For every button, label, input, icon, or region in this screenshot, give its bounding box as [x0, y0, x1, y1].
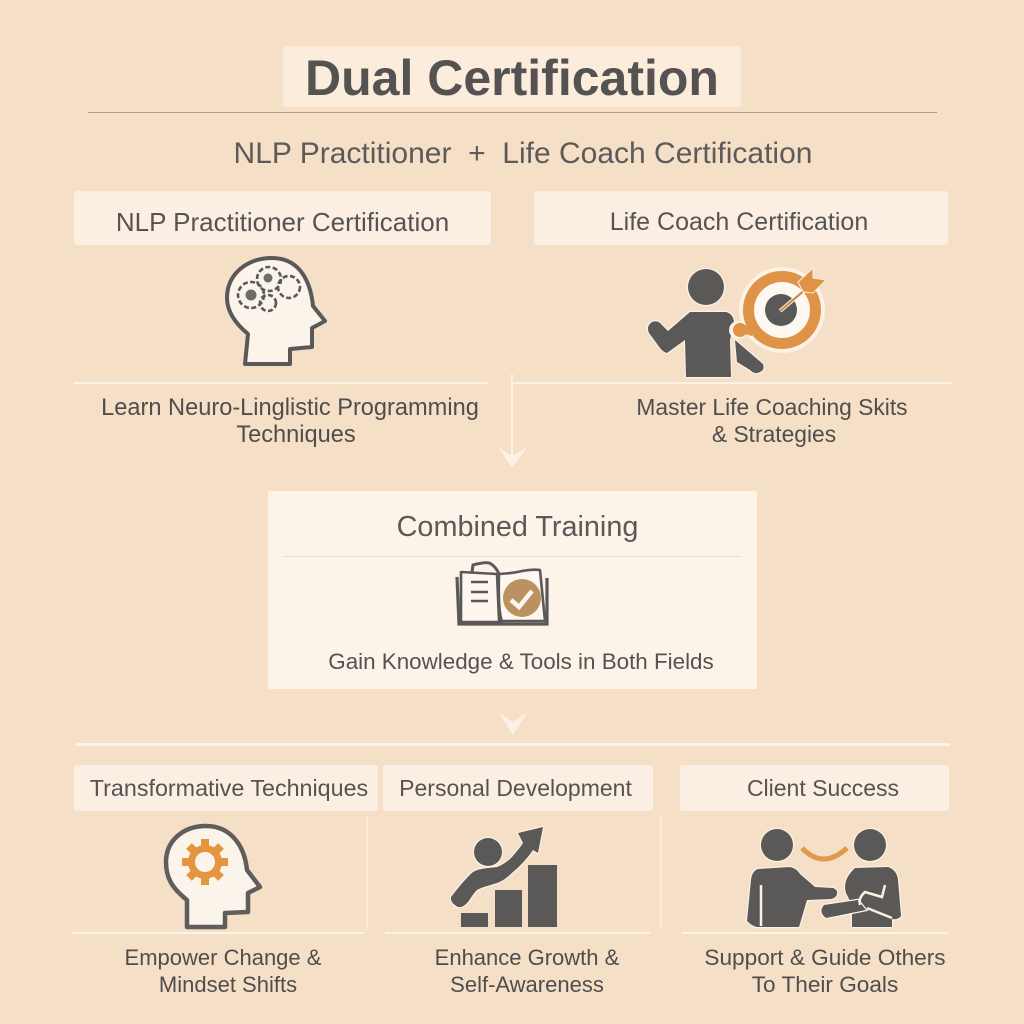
text: NLP description: Techniques [236, 422, 356, 448]
divider right [512, 382, 952, 384]
heading: Life Coach Certification [534, 191, 948, 245]
divider left [74, 382, 488, 384]
text: support and guide: Support & Guide Others [704, 945, 946, 970]
title: Dual Certification [305, 50, 719, 106]
icon: book with check [455, 561, 549, 626]
heading: client success: Client Success [747, 774, 899, 800]
heading: client success [680, 765, 949, 811]
divider: lower [76, 743, 950, 746]
icon: head with gears [225, 256, 328, 366]
heading: transformative techniques: Transformative Techniques [90, 774, 368, 800]
subtitle: NLP Practitioner + Life Coach Certification [234, 137, 812, 170]
heading: personal development: Personal Development [399, 774, 632, 800]
divider: col 3 [682, 932, 948, 934]
icon: person with target [646, 267, 827, 378]
text: NLP description: Learn Neuro-Linglistic Programming [101, 395, 479, 421]
text: enhance growth: Enhance Growth & [435, 945, 619, 970]
text: life coach description: & Strategies [712, 421, 836, 447]
arrow: chevron down [499, 713, 527, 735]
arrow: down [498, 374, 527, 468]
text: life coach description: Master Life Coaching Skits [636, 394, 908, 420]
icon: two people helping [746, 828, 902, 928]
icon: person on growth bars [450, 826, 557, 927]
divider: col 1 [72, 932, 364, 934]
text: life coach description [636, 394, 908, 447]
text: empower change: Mindset Shifts [159, 972, 297, 997]
text: support and guide: To Their Goals [752, 972, 898, 997]
heading: Life Coach Certification: Life Coach Certification [610, 208, 868, 236]
text: enhance growth: Self-Awareness [450, 972, 604, 997]
text: empower change: Empower Change & [125, 945, 321, 970]
heading: personal development [383, 765, 653, 811]
text: gain knowledge: Gain Knowledge & Tools in Both Fields [328, 649, 714, 674]
text: enhance growth [435, 945, 619, 997]
panel: combined training [268, 491, 757, 689]
heading: combined training: Combined Training [397, 511, 638, 543]
text: empower change [125, 945, 322, 997]
text: support and guide [704, 945, 946, 997]
heading: NLP Practitioner Certification [74, 191, 491, 245]
text: NLP description [101, 395, 479, 448]
icon: head with gear [164, 824, 262, 930]
heading: transformative techniques [74, 765, 378, 811]
divider: col 2 [385, 932, 650, 934]
heading: NLP Practitioner Certification: NLP Practitioner Certification [116, 207, 449, 237]
